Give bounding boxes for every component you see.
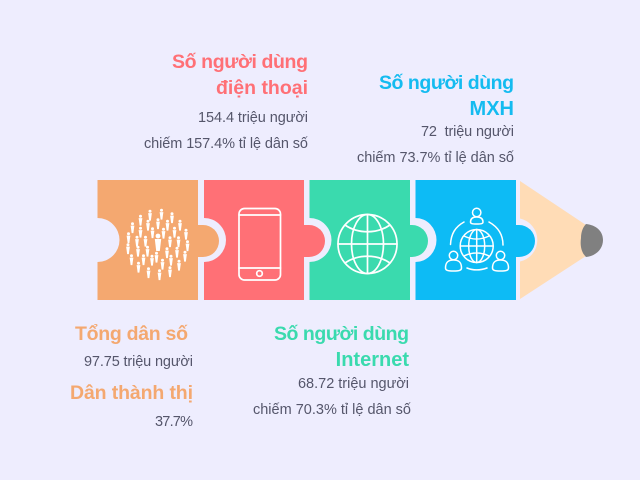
internet users share: chiếm 70.3% tỉ lệ dân số <box>253 402 411 418</box>
puzzle block: green internet <box>304 180 410 300</box>
text block: total population <box>70 323 193 430</box>
puzzle block: blue social network <box>410 180 535 300</box>
pencil infographic <box>98 180 603 300</box>
heading: phone users: Số người dùng <box>172 51 308 73</box>
pencil lead <box>581 224 603 257</box>
total population value: 97.75 triệu người <box>84 354 193 370</box>
heading: total population: Tổng dân số <box>75 323 188 345</box>
heading block: phone users <box>144 51 308 152</box>
icon: crowd of people <box>126 209 189 280</box>
icon: globe <box>338 214 397 274</box>
social users count: 72 triệu người <box>421 124 514 140</box>
heading: social users: Số người dùng <box>379 72 514 94</box>
phone users count: 154.4 triệu người <box>198 110 308 126</box>
pencil wood tip <box>520 181 586 299</box>
heading block: social network users <box>357 72 514 166</box>
heading: internet users: Số người dùng <box>274 323 409 345</box>
puzzle block: orange population <box>98 180 219 300</box>
icon: smartphone <box>239 208 280 280</box>
heading: phone users line 2: điện thoại <box>216 77 308 99</box>
icon: globe with people <box>446 208 508 271</box>
puzzle block: red phone <box>198 180 304 300</box>
heading: internet users line 2: Internet <box>336 349 409 371</box>
heading: social users line 2: MXH <box>470 98 514 120</box>
text block: internet users <box>253 323 411 418</box>
phone users share: chiếm 157.4% tỉ lệ dân số <box>144 136 308 152</box>
urban population value: 37.7% <box>155 414 193 430</box>
social users share: chiếm 73.7% tỉ lệ dân số <box>357 150 514 166</box>
heading: urban population: Dân thành thị <box>70 382 193 404</box>
internet users count: 68.72 triệu người <box>298 376 409 392</box>
